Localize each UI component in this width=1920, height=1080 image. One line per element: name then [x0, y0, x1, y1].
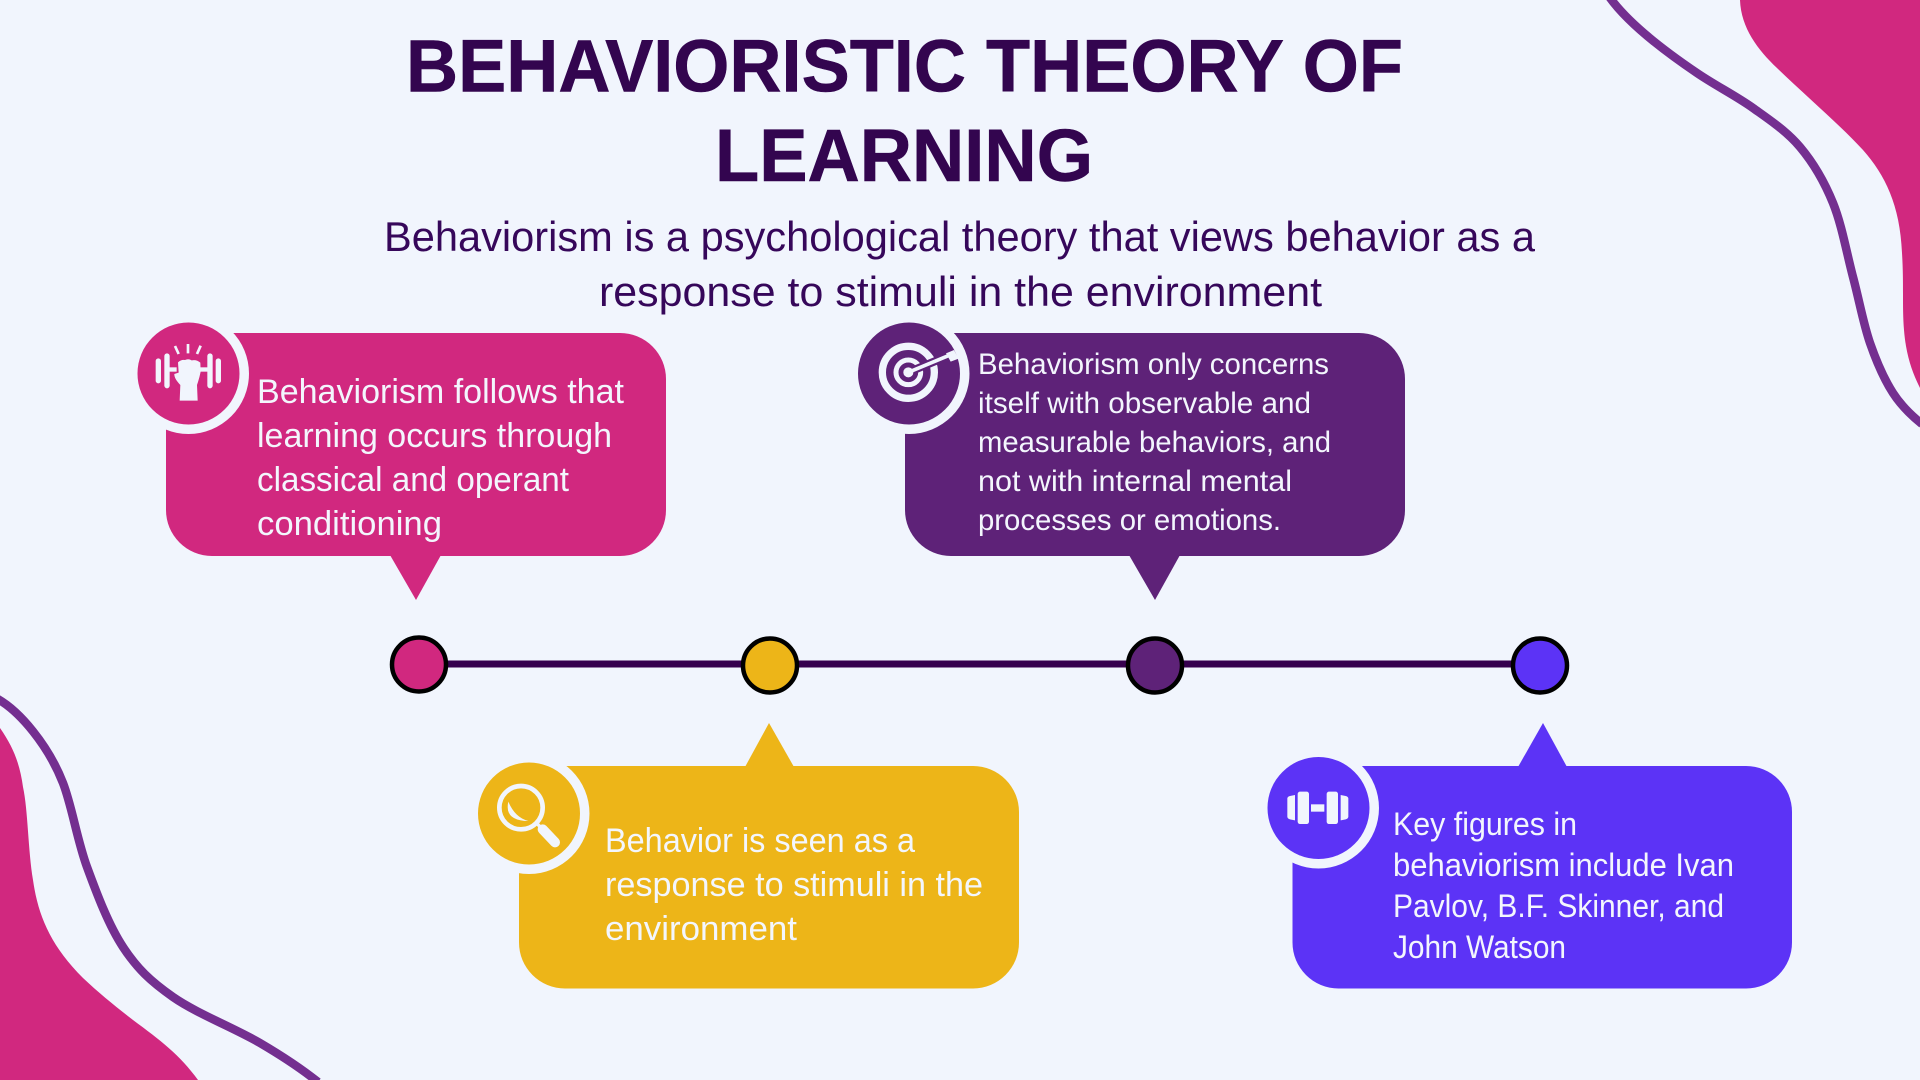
text: callout 4: Key figures in: [1393, 806, 1577, 842]
icon: magnifying glass: [499, 786, 555, 842]
subtitle: [384, 213, 1536, 315]
text: callout 1: learning occurs through: [257, 417, 612, 455]
text: callout 4: [1393, 806, 1734, 965]
subtitle: Behaviorism is a psychological theory that views behavior as a: [384, 213, 1536, 260]
decoration: top right blob and curve: [1608, 0, 1920, 424]
timeline node 1: [392, 638, 446, 692]
text: callout 3: measurable behaviors, and: [978, 426, 1331, 459]
text: callout 3: [978, 348, 1331, 537]
subtitle: response to stimuli in the environment: [599, 268, 1322, 315]
panel: stimuli response callout: [468, 723, 1019, 988]
text: callout 2: response to stimuli in the: [605, 866, 983, 904]
text: callout 4: John Watson: [1393, 929, 1566, 965]
icon: dumbbell and fist: [156, 344, 221, 401]
text: callout 3: processes or emotions.: [978, 504, 1281, 537]
text: callout 4: behaviorism include Ivan: [1393, 847, 1734, 883]
icon: dumbbell: [1287, 792, 1348, 824]
title: [406, 25, 1403, 197]
timeline node 3: [1128, 638, 1182, 692]
text: callout 2: environment: [605, 910, 798, 948]
text: callout 2: Behavior is seen as a: [605, 822, 915, 860]
panel: key figures callout: [1258, 723, 1792, 988]
text: callout 1: [257, 373, 625, 543]
text: callout 2: [605, 822, 983, 948]
panel: classical and operant conditioning callout: [128, 313, 666, 600]
text: callout 1: classical and operant: [257, 461, 570, 499]
timeline: [392, 638, 1567, 692]
timeline node 4: [1513, 638, 1567, 692]
text: callout 3: not with internal mental: [978, 465, 1292, 498]
text: callout 3: itself with observable and: [978, 387, 1311, 420]
icon: target with dart: [882, 346, 959, 398]
text: callout 4: Pavlov, B.F. Skinner, and: [1393, 888, 1724, 924]
text: callout 1: conditioning: [257, 505, 442, 543]
decoration: bottom left blob and curve: [0, 697, 318, 1080]
text: callout 3: Behaviorism only concerns: [978, 348, 1329, 381]
panel: observable behaviors callout: [848, 313, 1405, 600]
timeline node 2: [743, 638, 797, 692]
title: BEHAVIORISTIC THEORY OF: [406, 25, 1403, 108]
title: LEARNING: [715, 114, 1093, 197]
text: callout 1: Behaviorism follows that: [257, 373, 625, 411]
